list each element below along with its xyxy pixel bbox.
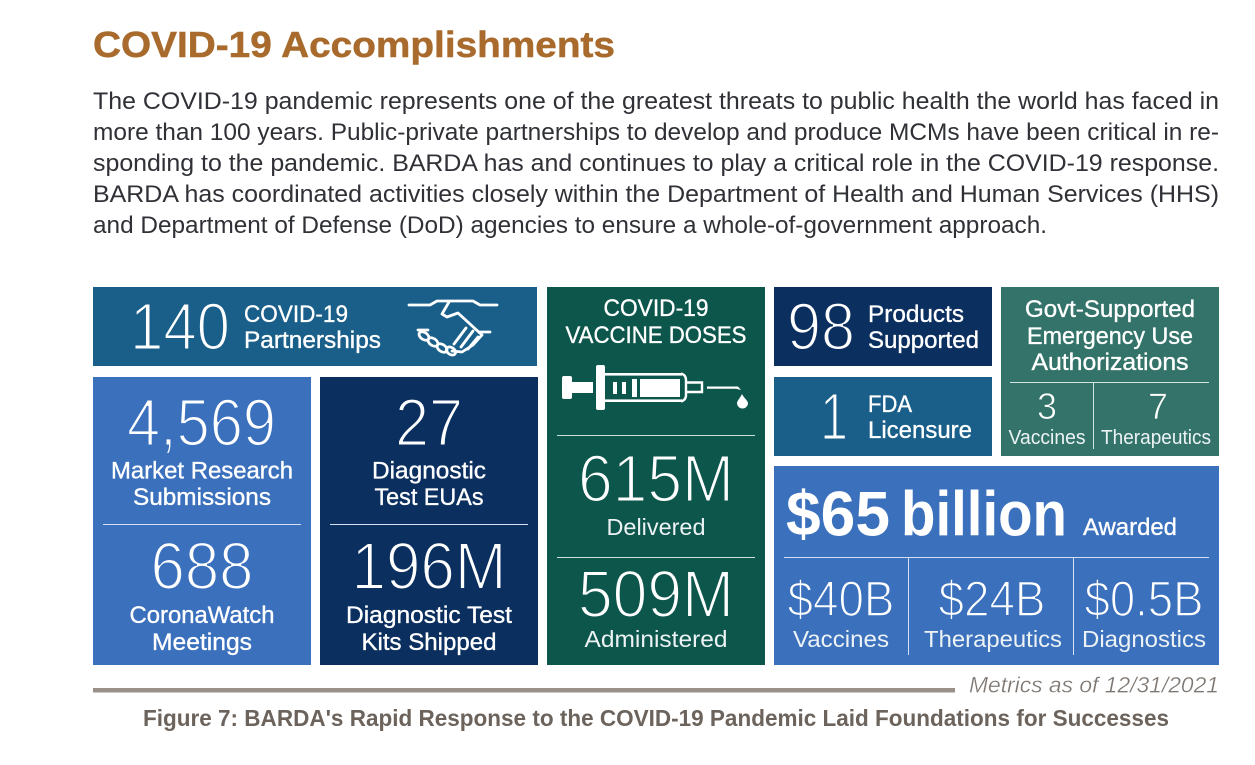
partnerships label: Partnerships — [244, 327, 381, 354]
test kits label: Diagnostic Test — [346, 602, 512, 629]
diagnostic EUA label — [372, 458, 486, 511]
EUA therapeutics label: Therapeutics — [1101, 427, 1211, 449]
EUA heading: Emergency Use — [1027, 323, 1193, 350]
diagnostic EUA number: 27 — [395, 386, 463, 460]
EUA heading — [1025, 296, 1195, 376]
intro paragraph: The COVID-19 pandemic represents one of the greatest threats to public health the world has faced in — [93, 88, 1219, 115]
panel: funding awarded — [774, 466, 1219, 665]
vaccine heading: COVID-19 — [604, 295, 708, 322]
administered number: 509M — [578, 557, 734, 632]
EUA heading: Govt-Supported — [1025, 296, 1195, 323]
partnerships label — [244, 301, 381, 354]
funding total: $65 — [786, 480, 890, 550]
figure caption: Figure 7: BARDA's Rapid Response to the COVID-19 Pandemic Laid Foundations for Successes — [143, 705, 1169, 731]
intro paragraph: and Department of Defense (DoD) agencies to ensure a whole-of-government approach. — [93, 212, 1047, 239]
vaccines label: Vaccines — [793, 626, 889, 652]
products number: 98 — [787, 290, 855, 364]
awarded label: Awarded — [1083, 514, 1177, 541]
icon: syringe — [562, 365, 748, 410]
panel: partnerships — [93, 287, 537, 366]
funding unit: billion — [901, 480, 1067, 550]
market research label — [111, 458, 293, 511]
EUA heading: Authorizations — [1032, 349, 1188, 376]
vaccine heading: VACCINE DOSES — [566, 322, 746, 349]
metrics date note: Metrics as of 12/31/2021 — [969, 672, 1219, 698]
partnerships label: COVID-19 — [244, 301, 348, 328]
products label — [868, 301, 979, 354]
delivered number: 615M — [578, 442, 734, 516]
test kits label: Kits Shipped — [362, 629, 496, 656]
icon: handshake — [409, 301, 497, 357]
products label: Products — [868, 301, 964, 328]
coronawatch label: CoronaWatch — [130, 602, 274, 629]
intro paragraph: more than 100 years. Public-private partnerships to develop and produce MCMs have been critical in re- — [93, 119, 1219, 146]
EUA therapeutics number: 7 — [1148, 386, 1168, 427]
products label: Supported — [868, 327, 979, 354]
diagnostics label: Diagnostics — [1082, 626, 1206, 652]
panel: emergency use authorizations — [1001, 287, 1219, 456]
partnerships number: 140 — [130, 290, 230, 364]
panel: products supported — [774, 287, 992, 366]
panel: FDA licensure — [774, 377, 992, 456]
vaccines amount: $40B — [788, 571, 894, 627]
EUA vaccines label: Vaccines — [1008, 427, 1086, 449]
panel: market research and coronawatch — [93, 377, 311, 665]
EUA vaccines number: 3 — [1037, 386, 1057, 427]
intro paragraph: sponding to the pandemic. BARDA has and continues to play a critical role in the COVID-19 response. — [93, 150, 1219, 177]
title: COVID-19 Accomplishments — [93, 24, 615, 65]
licensure label: Licensure — [868, 417, 972, 444]
diagnostic EUA label: Test EUAs — [374, 484, 484, 511]
coronawatch label: Meetings — [152, 629, 252, 656]
panel: vaccine doses — [547, 287, 765, 665]
panel: diagnostics — [320, 377, 538, 665]
diagnostic EUA label: Diagnostic — [372, 458, 486, 484]
test kits number: 196M — [352, 529, 506, 604]
test kits label — [346, 602, 512, 656]
intro paragraph — [93, 88, 1219, 239]
delivered label: Delivered — [606, 514, 706, 540]
market research label: Market Research — [111, 458, 293, 484]
licensure label: FDA — [868, 391, 912, 418]
coronawatch label — [130, 602, 274, 656]
therapeutics amount: $24B — [938, 571, 1046, 627]
licensure label — [868, 391, 972, 444]
therapeutics label: Therapeutics — [924, 626, 1062, 652]
market research label: Submissions — [133, 484, 271, 511]
market research number: 4,569 — [127, 386, 276, 460]
coronawatch number: 688 — [150, 529, 254, 604]
vaccine heading — [566, 295, 746, 349]
licensure number: 1 — [820, 380, 848, 454]
diagnostics amount: $0.5B — [1084, 571, 1204, 627]
administered label: Administered — [584, 626, 728, 652]
intro paragraph: BARDA has coordinated activities closely within the Department of Health and Human Services (HHS) — [93, 181, 1219, 208]
